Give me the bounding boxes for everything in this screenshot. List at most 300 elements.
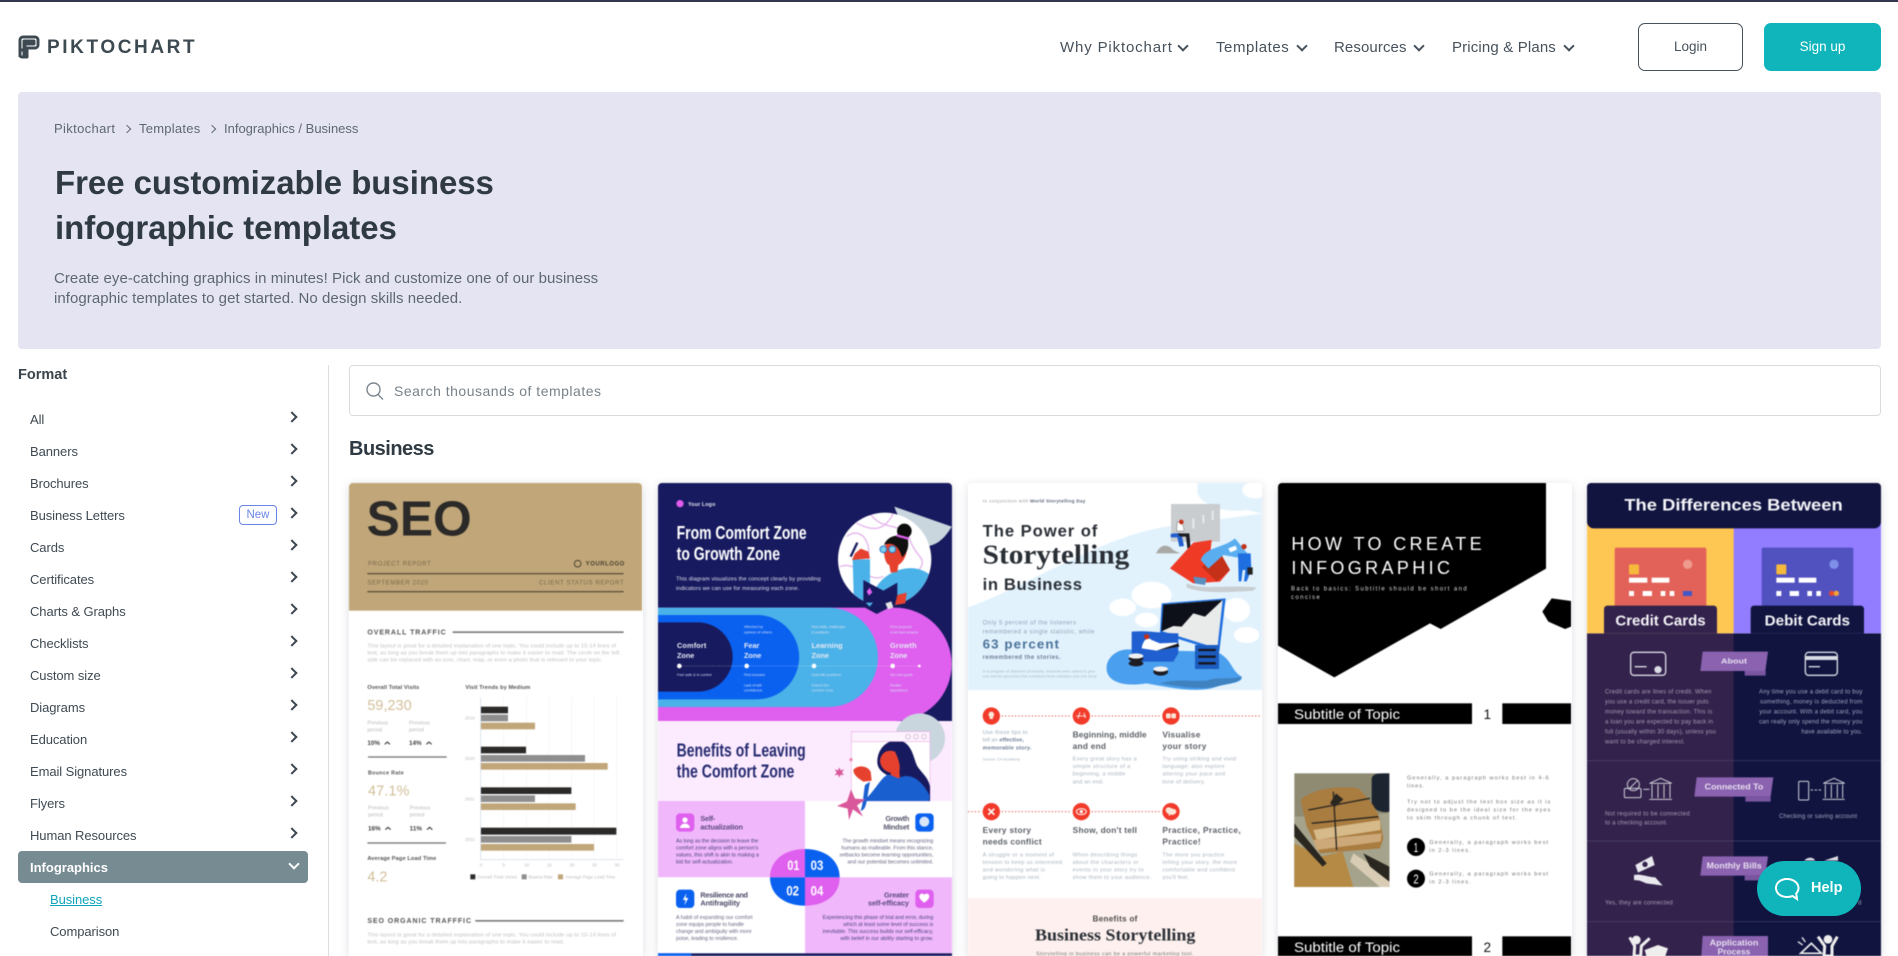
search placeholder: Search thousands of templates: [394, 383, 602, 399]
divider lines: [1587, 761, 1881, 922]
tip 6: Practice!: [1162, 836, 1201, 846]
sub-row: comparison: Comparison: [50, 924, 119, 938]
zone diagram: & problems: [812, 630, 829, 634]
zone diagram: Zone: [890, 651, 907, 660]
body text: lines.: [1407, 783, 1425, 789]
tip 3: Visualise: [1162, 729, 1201, 739]
SEO header band: SEPTEMBER 2020: [367, 581, 429, 587]
KPI column: period: [409, 728, 424, 734]
section: about: About: [1721, 656, 1748, 665]
tip 2: Beginning, middle: [1073, 729, 1147, 739]
tip 3: altering your pace and: [1162, 772, 1225, 778]
KPI column: Previous: [368, 806, 389, 812]
topic 1 bar: [1278, 703, 1571, 724]
tip 6: telling your story, the more: [1162, 860, 1237, 866]
template card: comfort zone to growth zone: [657, 482, 953, 956]
tab: debit cards: Debit Cards: [1765, 614, 1850, 630]
tip 5: about the characters or: [1073, 860, 1139, 866]
KPI column: Average Page Load Time: [367, 856, 436, 862]
bar chart: visit trends by medium: 10: [524, 863, 530, 868]
logo: PIKTOCHART: [47, 37, 197, 58]
benefit 2: resilience: A habit of expanding our comfort: [676, 915, 753, 921]
benefit 3: growth mindset: Growth: [885, 814, 910, 823]
overall traffic heading and text: This layout is great for a detailed explanation of one topic. You could include up to 10-14 lines of: [367, 644, 616, 650]
benefit 2: resilience: Resilience and: [700, 890, 748, 899]
benefit quadrants: [658, 801, 952, 956]
breadcrumb: Infographics / Business: [224, 121, 358, 136]
zone diagram: Growth: [890, 641, 917, 650]
KPI column: 14%: [409, 740, 422, 747]
SEO header band: YOURLOGO: [586, 561, 625, 567]
tip 5: [1073, 803, 1162, 881]
row: human resources: [30, 828, 298, 842]
headline: In conjunction with: [983, 498, 1029, 503]
row: email signatures: Email Signatures: [30, 764, 127, 778]
icon: search: [366, 382, 384, 400]
bar chart: visit trends by medium: Bounce Rate: [529, 874, 553, 879]
section: connected to: to a checking account.: [1605, 820, 1668, 826]
row: business letters with new badge: Business Letters: [30, 508, 125, 522]
tip 5: show them to your audience.: [1073, 875, 1152, 881]
tip 4: Every story: [983, 825, 1031, 835]
tip 1: tell an effective,: [983, 738, 1024, 744]
benefit 3: growth mindset: humans as malleable. From this stance,: [841, 845, 933, 851]
tip 5: events in your story try to: [1073, 867, 1144, 873]
statistic block: [983, 621, 1097, 678]
bar chart: visit trends by medium: 2019: [465, 716, 475, 721]
zone diagram: Learning: [812, 641, 843, 650]
section: about: have available to you.: [1801, 730, 1863, 736]
section: about: money toward the transaction. This is: [1605, 710, 1712, 716]
row: brochures: Brochures: [30, 476, 89, 490]
row: charts and graphs: Charts & Graphs: [30, 604, 126, 618]
row: diagrams: Diagrams: [30, 700, 85, 714]
section: about: [1604, 652, 1863, 746]
tip 6: Practice, Practice,: [1162, 825, 1241, 835]
section: about: full (usually within 30 days), unless you: [1605, 730, 1716, 736]
illustration: debit card: [1762, 548, 1853, 608]
body text: designed to be the ideal size for the eyes: [1407, 808, 1551, 814]
section: connected to: Not required to be connected: [1605, 811, 1690, 817]
section: connected to: [1605, 777, 1857, 826]
benefit 4: self-efficacy: self-efficacy: [868, 899, 910, 908]
headline: in Business: [983, 575, 1082, 594]
tip 1: [983, 707, 1072, 761]
section: monthly bills: [1605, 856, 1861, 907]
row: banners: Banners: [30, 444, 78, 458]
SEO header band: [349, 483, 642, 611]
title: Back to basics: Subtitle should be short and: [1291, 587, 1467, 593]
row: flyers: Flyers: [30, 796, 65, 810]
center number badge: 01: [787, 857, 799, 873]
tip 4: going to happen next.: [983, 875, 1041, 881]
zone diagram: confidence: [744, 689, 762, 693]
numbered point 1: 1: [1414, 840, 1418, 855]
row: brochures: [30, 476, 298, 490]
section: about: want to be charged interest.: [1604, 740, 1685, 746]
tip 2: Every great story has a: [1073, 756, 1138, 762]
row: infographics selected: Infographics: [30, 860, 108, 874]
SEO organic traffic heading and text: SEO ORGANIC TRAFFFIC: [367, 918, 471, 925]
center number badge: 02: [786, 883, 799, 899]
benefit 1: self-actualization: bid for self-actualization.: [676, 860, 733, 866]
benefits of business storytelling section: Benefits of: [1093, 915, 1138, 924]
section: application process: Application: [1710, 939, 1758, 948]
KPI column: period: [368, 813, 383, 819]
tip 3: [1162, 707, 1262, 785]
row: all: All: [30, 412, 44, 426]
KPI column: Overall Total Visits: [367, 685, 419, 691]
sub-row: business: Business: [50, 892, 102, 906]
navigation menu: [1060, 39, 1575, 56]
row: business letters with new badge: New: [246, 508, 270, 520]
title: [1291, 534, 1482, 601]
tab: credit cards: Credit Cards: [1615, 614, 1706, 630]
headline: World Storytelling Day: [1030, 498, 1086, 503]
navigation menu: Why Piktochart: [1060, 39, 1173, 56]
hero banner: [18, 92, 1881, 349]
section: connected to: Connected To: [1705, 782, 1763, 791]
section: about: a loan you are expected to pay back in: [1605, 720, 1713, 726]
tab: credit cards: [1604, 606, 1717, 633]
tip 2: and an end.: [1073, 779, 1104, 785]
section: connected to: Checking or saving account: [1779, 814, 1857, 820]
benefits section heading: Benefits of Leaving: [677, 740, 806, 761]
benefit 2: resilience: zone equips people to handle: [676, 922, 744, 928]
numbered point 1: in 2-3 lines.: [1429, 848, 1471, 854]
KPI column: 11%: [410, 825, 422, 832]
tip 1: Use these tips to: [983, 730, 1028, 736]
headline: [983, 498, 1130, 594]
benefit 1: self-actualization: comfort zone aligns with a person's: [676, 845, 759, 851]
benefit 4: self-efficacy: with belief in our ability starting to grow.: [840, 936, 933, 942]
topic 1 bar: 1: [1484, 707, 1491, 722]
benefit 1: self-actualization: As long as the decision to leave the: [676, 838, 758, 844]
tab: debit cards: [1751, 606, 1864, 633]
template card: power of storytelling: [968, 483, 1262, 956]
tip 2: and end: [1073, 741, 1106, 751]
topic 2 bar: 2: [1484, 940, 1491, 955]
tip 3: tone of delivery.: [1162, 779, 1206, 785]
KPI column: 4.2: [367, 869, 387, 885]
KPI column: Bounce Rate: [368, 770, 404, 776]
light blue background shapes: [968, 482, 1268, 690]
bar chart: visit trends by medium: 25: [592, 863, 597, 868]
benefit 3: growth mindset: setbacks become learning opportunities,: [839, 852, 933, 858]
icon: speech bubble: [1775, 878, 1800, 901]
zone diagram: Feel safe & in control: [677, 673, 712, 677]
KPI column: 47.1%: [368, 783, 410, 799]
benefits of business storytelling section: Business Storytelling: [1035, 926, 1196, 945]
numbered point 2: in 2-3 lines.: [1429, 880, 1471, 886]
tip 2: [1073, 707, 1162, 785]
title: INFOGRAPHIC: [1291, 558, 1450, 578]
tip 4: needs conflict: [983, 836, 1042, 846]
navigation menu: Templates: [1216, 39, 1289, 56]
help label: Help: [1811, 880, 1842, 896]
row: education: [30, 732, 298, 746]
header text: From Comfort Zone: [677, 522, 807, 543]
header text: Your Logo: [688, 502, 716, 508]
SEO header band: CLIENT STATUS REPORT: [539, 581, 624, 587]
title: HOW TO CREATE: [1291, 534, 1482, 554]
row: certificates: [30, 572, 298, 586]
row: checklists: Checklists: [30, 636, 88, 650]
illustration: credit card: [1615, 548, 1706, 608]
login button: Login: [1674, 39, 1707, 54]
row: custom size: Custom size: [30, 668, 101, 682]
zone diagram: Zone: [812, 651, 829, 660]
row: banners: [30, 444, 298, 458]
benefit 2: resilience: change and ambiguity with more: [676, 929, 752, 935]
tip 6: comfortable and confident: [1162, 867, 1235, 873]
section: application process: [1630, 935, 1837, 956]
section: monthly bills: Yes, they are connected: [1605, 901, 1673, 907]
benefit 1: self-actualization: actualization: [700, 822, 744, 831]
tip 3: your story: [1162, 741, 1207, 751]
statistic block: Only 5 percent of the listeners: [983, 621, 1076, 627]
title band: The Differences Between: [1624, 496, 1843, 515]
page description: infographic templates to get started. No design skills needed.: [54, 290, 462, 307]
template card: credit vs debit cards: [1586, 482, 1882, 956]
header text: to Growth Zone: [677, 543, 780, 564]
sign up button: [1764, 23, 1881, 71]
header text: indicators we can use for measuring each zone.: [676, 586, 800, 592]
tip 3: Try using striking and vivid: [1162, 756, 1236, 762]
zone diagram: Comfort: [677, 641, 707, 650]
yellow and purple header panels: [1587, 520, 1881, 633]
row: cards: Cards: [30, 540, 64, 554]
search box: [349, 365, 1881, 416]
benefit 2: resilience: poise, leading to resilience.: [676, 936, 738, 942]
SEO header band: PROJECT REPORT: [368, 561, 431, 567]
illustration: woman reading: [838, 507, 952, 614]
row: certificates: Certificates: [30, 572, 94, 586]
illustration: woman at window: [835, 713, 945, 820]
zone diagram: Zone: [677, 651, 694, 660]
benefit 3: growth mindset: and our potential becomes unlimited.: [847, 860, 933, 866]
row: all: [30, 412, 298, 426]
benefit 2: resilience: Antifragility: [700, 899, 741, 908]
tip 4: [968, 803, 1072, 881]
headline: Storytelling: [983, 540, 1130, 570]
body text: Generally, a paragraph works best in 4-6: [1407, 775, 1549, 781]
body text: Try not to adjust the text box size as it is: [1407, 800, 1551, 806]
sidebar divider: [328, 365, 329, 956]
row: email signatures: [30, 764, 298, 778]
SEO organic traffic heading and text: [367, 918, 624, 945]
bar chart: visit trends by medium: 2020: [465, 756, 475, 761]
bar chart: visit trends by medium: 15: [547, 863, 552, 868]
KPI column: Previous: [367, 721, 388, 727]
section: about: can really only spend the money you: [1759, 720, 1862, 726]
zone diagram: Zone: [744, 651, 761, 660]
benefit 3: growth mindset: The growth mindset means recognizing: [842, 838, 933, 844]
zone diagram: Realize: [890, 684, 902, 688]
navigation menu: Pricing & Plans: [1452, 39, 1556, 56]
page title: Free customizable business: [55, 164, 494, 201]
benefit 4: self-efficacy: Experiencing this phase of trial and error, during: [823, 915, 933, 921]
header text: [676, 500, 821, 592]
SEO header band: SEO: [367, 493, 472, 547]
section: about: your account. With a debit card, you: [1759, 710, 1862, 716]
topic 1 bar: Subtitle of Topic: [1294, 707, 1400, 722]
numbered point 1: Generally, a paragraph works best: [1429, 840, 1548, 846]
benefits section heading: the Comfort Zone: [677, 761, 794, 782]
breadcrumb: [54, 121, 358, 136]
overall traffic heading and text: [367, 629, 624, 664]
zone diagram: & set new dreams: [890, 630, 918, 634]
illustration: sofa and chart scene: [1107, 598, 1242, 690]
KPI column: [367, 685, 447, 885]
tip 6: [1162, 803, 1241, 881]
top edge line: [0, 0, 1898, 2]
bar chart: visit trends by medium: 20: [570, 863, 575, 868]
topic 2 bar: Subtitle of Topic: [1294, 940, 1400, 955]
zone diagram: Find excuses: [744, 673, 765, 677]
photo: stacked packages: [1294, 773, 1389, 887]
tip 4: and wondering what is: [983, 867, 1045, 873]
KPI column: 59,230: [367, 698, 412, 714]
benefit 1: self-actualization: [676, 813, 759, 866]
bar chart: visit trends by medium: 2021: [465, 797, 475, 802]
benefit 1: self-actualization: values, this shift is akin to making a: [676, 852, 759, 858]
KPI column: 10%: [367, 740, 380, 747]
row: custom size: [30, 668, 298, 682]
zone diagram: [658, 608, 952, 721]
zone diagram: Fear: [744, 641, 759, 650]
page description: Create eye-catching graphics in minutes! Pick and customize one of our business: [54, 270, 598, 287]
zone diagram: Set new goals: [890, 673, 913, 677]
benefits section heading: [658, 721, 952, 803]
tip 1: memorable story.: [983, 745, 1032, 751]
zone diagram: Affected by: [744, 625, 763, 629]
row: infographics selected: [18, 851, 308, 883]
benefit 4: self-efficacy: Greater: [884, 890, 909, 899]
benefit 4: self-efficacy: which at least some level of success is: [843, 922, 934, 928]
section: monthly bills: Monthly Bills: [1707, 862, 1762, 871]
zone diagram: New skills, challenges: [812, 625, 846, 629]
title: concise: [1291, 595, 1320, 601]
row: charts and graphs: [30, 604, 298, 618]
page description: [54, 270, 598, 307]
SEO organic traffic heading and text: This layout is great for a detailed explanation of one topic. You could include up to 10-14 lines of: [367, 932, 616, 938]
benefit 4: self-efficacy: inevitable. This success builds our self-efficacy,: [823, 929, 933, 935]
tip 5: When describing things: [1073, 852, 1138, 858]
page title: [55, 164, 494, 246]
topic 2 bar: [1278, 936, 1571, 956]
login button: [1638, 23, 1743, 71]
headline: The Power of: [983, 522, 1098, 541]
bar chart: visit trends by medium: 30: [615, 863, 620, 868]
sign up button: Sign up: [1800, 39, 1845, 54]
section: about: something, money is deducted from: [1760, 700, 1862, 706]
section: about: Credit cards are lines of credit. When: [1605, 690, 1711, 696]
template card: SEO report: [348, 482, 643, 945]
template card: how to create infographic: [1277, 482, 1572, 956]
bar chart: visit trends by medium: 5: [502, 863, 505, 868]
bar chart: visit trends by medium: Average Page Load Time: [565, 874, 616, 879]
overall traffic heading and text: side can be replaced with an icon, chart, map, or even a photo that is relevant to your topic.: [367, 658, 603, 664]
numbered point 2: 2: [1413, 872, 1419, 887]
section: monthly bills: d: [1858, 901, 1861, 907]
benefit 4: self-efficacy: [823, 890, 934, 942]
tip 2: beginning, a middle: [1073, 772, 1125, 778]
page title: infographic templates: [55, 209, 397, 246]
KPI column: 16%: [368, 825, 381, 832]
row: business letters with new badge: [30, 505, 298, 525]
help chat button: [1757, 861, 1861, 916]
bar chart: visit trends by medium: Overall Total Views: [477, 874, 517, 879]
numbered point 1: [1407, 838, 1548, 856]
body text: [1407, 775, 1551, 822]
breadcrumb: Templates: [139, 121, 200, 136]
KPI column: Previous: [409, 721, 430, 727]
zone diagram: opinion of others: [744, 630, 772, 634]
tip 2: simple structure of a: [1073, 764, 1131, 770]
black header shape: [1278, 483, 1546, 677]
header text: This diagram visualizes the concept clearly by providing: [676, 576, 821, 582]
zone diagram: Extend the: [812, 684, 829, 688]
numbered point 2: Generally, a paragraph works best: [1429, 872, 1548, 878]
SEO organic traffic heading and text: text, as long as you break them up into paragraphs to make it easier to read.: [367, 939, 565, 945]
bar chart: visit trends by medium: Visit Trends by Medium: [465, 685, 530, 691]
black hexagon: [1542, 598, 1571, 629]
KPI column: period: [410, 813, 425, 819]
zone diagram: comfort zone: [812, 689, 833, 693]
statistic block: 63 percent: [983, 636, 1060, 651]
navigation menu: Resources: [1334, 39, 1407, 56]
tip 5: Show, don't tell: [1073, 825, 1137, 835]
row: human resources: Human Resources: [30, 828, 136, 842]
format heading: Format: [18, 367, 67, 383]
tip 6: The more you practice: [1162, 852, 1224, 858]
row: checklists: [30, 636, 298, 650]
row: cards: [30, 540, 298, 554]
benefit 1: self-actualization: Self-: [700, 814, 716, 823]
center number badge: 04: [811, 883, 824, 899]
statistic block: remembered the stories.: [983, 655, 1061, 661]
zone diagram: Find purpose: [890, 625, 912, 629]
sidebar filter panel: [18, 365, 329, 956]
benefits of business storytelling section: [968, 898, 1262, 956]
row: diagrams: [30, 700, 298, 714]
center number badge: [770, 849, 840, 906]
tip 4: tension to keep us interested: [983, 860, 1062, 866]
title band: [1587, 483, 1881, 528]
tip 3: language; also explore: [1162, 764, 1225, 770]
bar chart: visit trends by medium: 0: [480, 863, 483, 868]
center number badge: 03: [811, 857, 824, 873]
overall traffic heading and text: OVERALL TRAFFIC: [367, 629, 446, 636]
tip 6: you'll feel.: [1162, 875, 1189, 881]
bar chart: visit trends by medium: [465, 685, 624, 879]
statistic block: one-minute speeches that contained three statistics and one story.: [983, 674, 1097, 678]
benefit 2: resilience: [676, 890, 753, 942]
tip 4: A struggle or a moment of: [983, 852, 1054, 858]
body text: to skim through a chunk of text.: [1407, 816, 1517, 822]
statistic block: In a program at Stanford University, students were asked to give: [983, 670, 1095, 674]
zone diagram: Deal with problems: [812, 673, 841, 677]
numbered point 2: [1407, 870, 1548, 888]
row: flyers: [30, 796, 298, 810]
zone diagram: Lack of self-: [744, 684, 763, 688]
benefit 3: growth mindset: Mindset: [883, 822, 910, 831]
statistic block: remembered a single statistic, while: [983, 629, 1095, 635]
breadcrumb: Piktochart: [54, 121, 115, 136]
KPI column: period: [367, 728, 382, 734]
KPI column: Previous: [410, 806, 431, 812]
